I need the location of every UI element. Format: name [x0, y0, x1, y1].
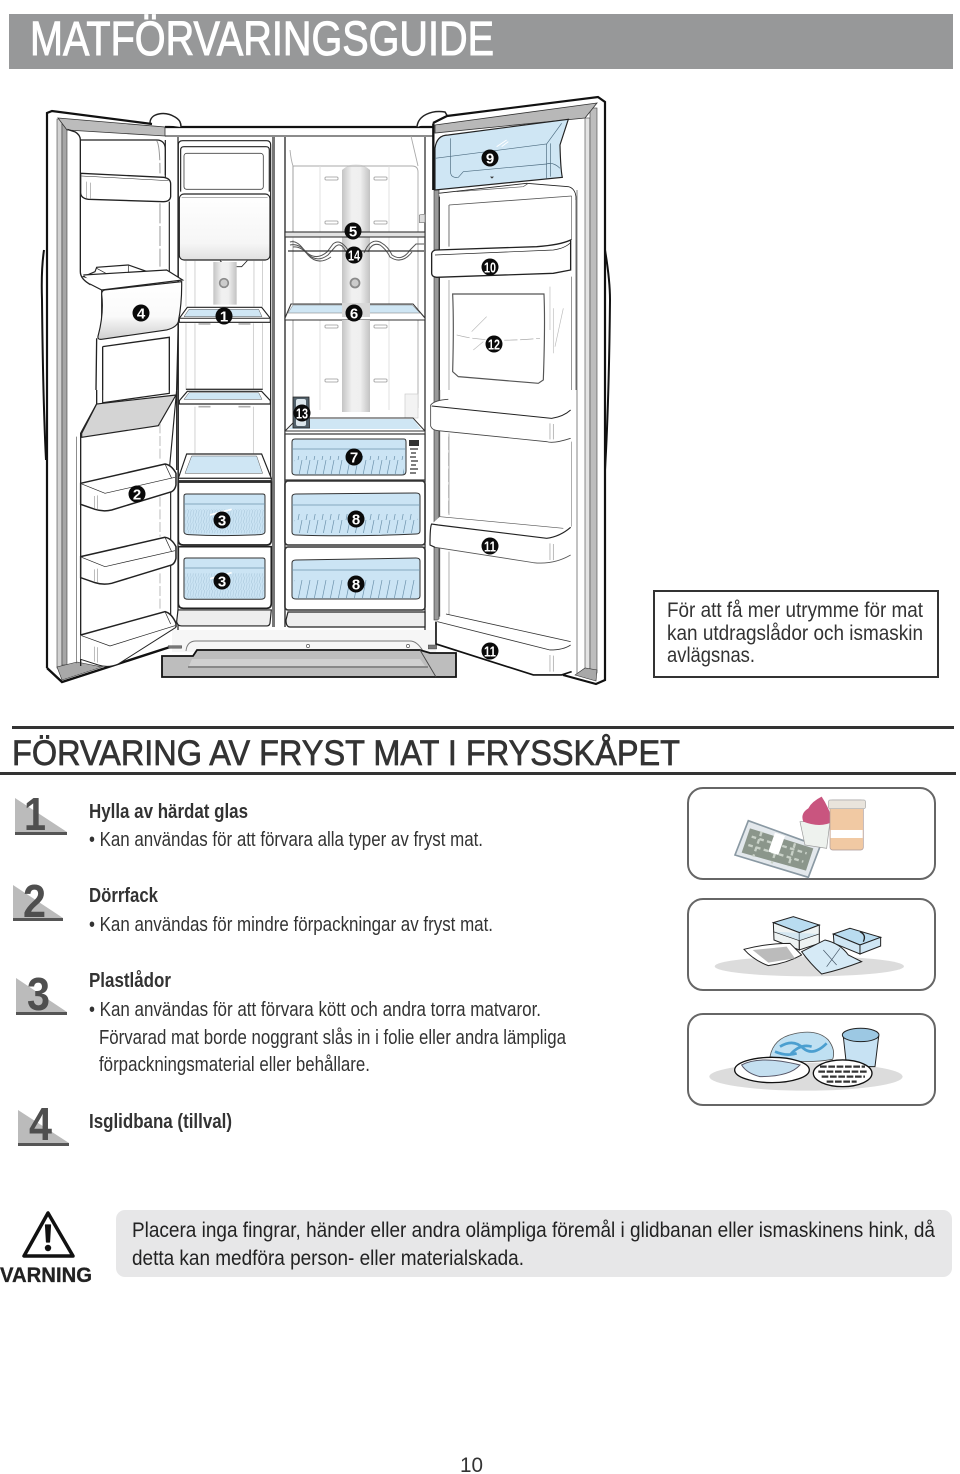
drawer	[178, 547, 271, 608]
ice dispenser	[83, 270, 183, 339]
section heading	[0, 726, 956, 775]
door bin	[431, 399, 571, 442]
door bin	[436, 614, 572, 675]
badge 2	[128, 486, 146, 504]
section heading: FÖRVARING AV FRYST MAT I FRYSSKÅPET	[12, 734, 680, 773]
badge 6: 6	[350, 306, 358, 322]
shelf 5	[285, 232, 425, 237]
badge 1: 1	[220, 308, 228, 326]
kick plate and grille	[162, 630, 456, 677]
fridge illustration	[42, 97, 610, 684]
badge 8: 8	[352, 576, 360, 594]
control panel	[409, 440, 419, 473]
bin 9	[433, 119, 568, 192]
note box: kan utdragslådor och ismaskin	[667, 622, 923, 645]
badge 12: 12	[488, 336, 500, 354]
item 1 text: • Kan användas för att förvara alla typer av fryst mat.	[89, 829, 483, 851]
item 1 text: Hylla av härdat glas	[89, 801, 248, 823]
left door	[47, 111, 170, 682]
item 3 text: • Kan användas för att förvara kött och andra torra matvaror.	[89, 999, 541, 1021]
number icon 3: 3	[27, 968, 50, 1020]
warning message: detta kan medföra person- eller materialskada.	[132, 1247, 524, 1270]
badge 14: 14	[348, 248, 360, 264]
cabinet body	[42, 112, 610, 632]
number icon 4	[18, 1098, 69, 1150]
item 2 text	[89, 885, 493, 936]
warning icon	[0, 1213, 92, 1287]
item 4 text: Isglidbana (tillval)	[89, 1111, 232, 1133]
item 2 text: Dörrfack	[89, 885, 159, 907]
badge 6	[346, 304, 362, 322]
door bin	[81, 537, 176, 584]
badge 11: 11	[484, 538, 496, 556]
badge 9: 9	[486, 150, 494, 168]
food card 1	[688, 788, 935, 879]
drawer 8 lower	[285, 547, 425, 610]
number icon 4: 4	[29, 1098, 52, 1150]
shelf 6	[285, 303, 425, 320]
food card 3	[688, 1014, 935, 1105]
badge 8	[348, 510, 364, 528]
number icon 3	[16, 968, 67, 1020]
item 3 text: förpackningsmaterial eller behållare.	[99, 1054, 370, 1076]
door panel	[438, 183, 576, 390]
badge 3: 3	[218, 512, 226, 530]
drawer 8	[285, 481, 425, 545]
drawer	[178, 482, 271, 545]
right door	[433, 97, 605, 684]
badge 13: 13	[296, 406, 308, 422]
drawer 7	[285, 434, 425, 480]
title bar: MATFÖRVARINGSGUIDE	[30, 13, 494, 66]
item 3 text	[89, 969, 567, 1076]
badge 4: 4	[137, 306, 146, 322]
note box	[654, 591, 938, 677]
door bin	[430, 517, 571, 563]
number icon 2: 2	[23, 875, 46, 927]
badge 5	[344, 222, 362, 240]
note box: avlägsnas.	[667, 644, 755, 667]
badge 8	[348, 576, 364, 594]
fridge compartment	[285, 136, 425, 627]
door shelf	[81, 173, 171, 202]
title bar	[9, 13, 953, 69]
panel 12	[453, 287, 563, 383]
number icon 1: 1	[24, 788, 46, 840]
item 2 text: • Kan användas för mindre förpackningar av fryst mat.	[89, 914, 493, 936]
item 3 text: Förvarad mat borde noggrant slås in i folie eller andra lämpliga	[99, 1027, 567, 1049]
freezer compartment	[178, 141, 271, 390]
ice maker	[179, 194, 270, 267]
badge 5: 5	[349, 224, 357, 240]
door bin	[81, 464, 176, 511]
warning icon: VARNING	[0, 1264, 92, 1287]
badge 3	[214, 572, 230, 590]
lower shelf	[285, 418, 425, 434]
badge 7: 7	[350, 450, 358, 466]
badge 11: 11	[484, 644, 496, 660]
ice bucket	[83, 265, 154, 285]
food card 2	[688, 899, 935, 990]
item 3 text: Plastlådor	[89, 969, 171, 992]
badge 8: 8	[352, 512, 360, 528]
badge 7	[346, 448, 362, 466]
badge 10: 10	[484, 260, 496, 276]
bottle tray 13	[293, 397, 310, 428]
badge 2: 2	[133, 486, 141, 504]
item 1 text	[89, 801, 483, 851]
warning message	[116, 1210, 952, 1277]
number icon 1	[15, 788, 67, 840]
badge 4	[132, 304, 150, 322]
badge 3	[214, 512, 230, 530]
bin 10	[432, 240, 571, 277]
badge 9	[482, 150, 498, 168]
door bin	[81, 612, 176, 666]
badge 1	[216, 308, 232, 326]
badge 3: 3	[218, 574, 226, 590]
wine rack	[288, 241, 424, 261]
number badges	[128, 150, 502, 660]
number icon 2	[13, 875, 63, 927]
note box: För att få mer utrymme för mat	[667, 599, 923, 622]
